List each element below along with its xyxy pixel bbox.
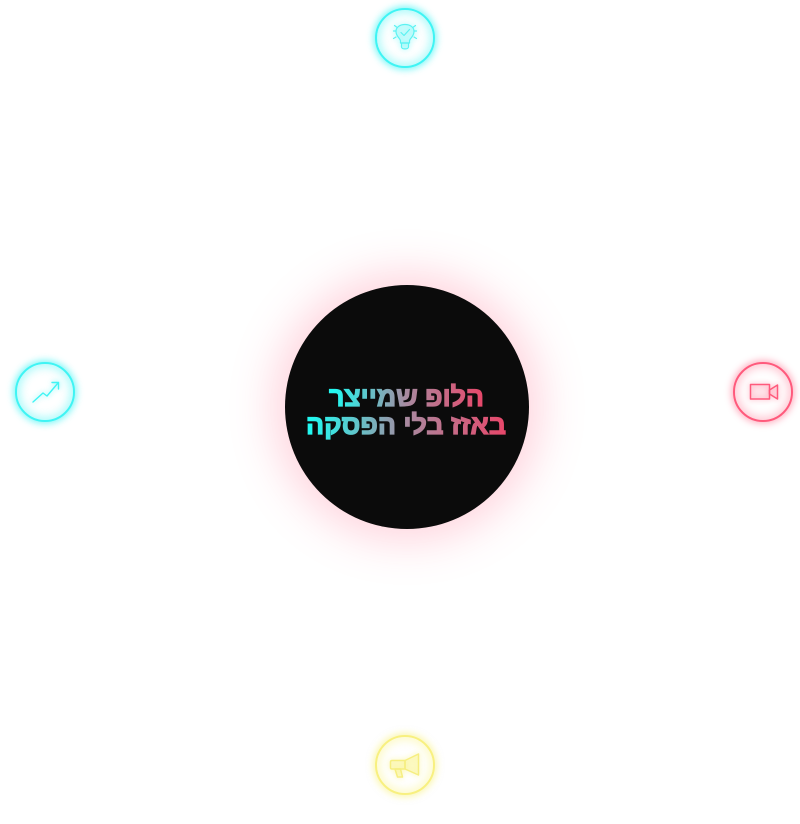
icon: lightbulb node (top)	[375, 8, 435, 68]
icon: growth arrow node (left)	[15, 362, 75, 422]
icon: video camera node (right)	[733, 362, 793, 422]
title line 1: הלופ שמייצר	[329, 382, 484, 412]
icon: megaphone node (bottom)	[375, 735, 435, 795]
central circle with neon glow	[285, 285, 529, 529]
title: Hebrew headline	[306, 382, 506, 440]
title line 2: באזז בלי הפסקה	[306, 410, 506, 440]
